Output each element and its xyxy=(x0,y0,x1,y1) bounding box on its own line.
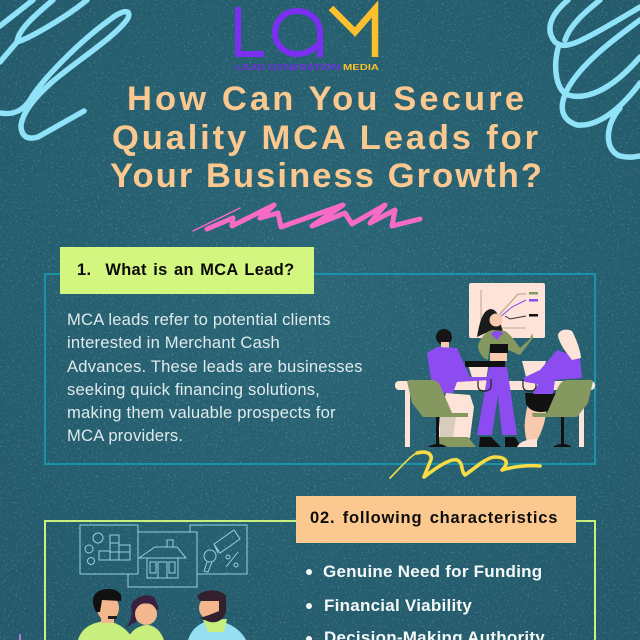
text block: definition: MCA providers. xyxy=(67,426,183,445)
person: right seated xyxy=(517,330,582,447)
icon: chart board xyxy=(469,283,545,338)
bag handles xyxy=(478,379,536,391)
heading: what is an MCA lead: 1. What is an MCA Lead? xyxy=(77,261,294,279)
bullet list xyxy=(306,562,545,640)
person: left seated xyxy=(427,329,490,447)
text block: definition: Advances. These leads are businesses xyxy=(67,357,363,376)
text block: definition: MCA leads refer to potential clients xyxy=(67,310,331,329)
heading: following characteristics: 02. following characteristics xyxy=(310,509,558,527)
heading: following characteristics xyxy=(296,496,576,543)
text block: definition: seeking quick financing solutions, xyxy=(67,380,320,399)
person: bearded man xyxy=(188,590,246,640)
heading: what is an MCA lead xyxy=(60,247,314,294)
title: How Can You Secure xyxy=(127,80,524,118)
logo: LEAD GENERATION xyxy=(236,62,340,72)
text block: definition: making them valuable prospects for xyxy=(67,403,336,422)
person: man with moustache xyxy=(78,589,134,640)
table xyxy=(395,381,595,447)
title: Your Business Growth? xyxy=(110,157,542,195)
text block: definition xyxy=(67,310,363,445)
person: presenter xyxy=(465,309,533,447)
chair: right xyxy=(532,380,593,447)
panel: following characteristics xyxy=(44,520,596,640)
chair: left xyxy=(407,380,468,447)
logo: MEDIA xyxy=(343,62,379,72)
bullet list: Genuine Need for Funding xyxy=(323,562,542,581)
laptops xyxy=(467,361,546,381)
bullet list: Financial Viability xyxy=(324,596,472,615)
text block: definition: interested in Merchant Cash xyxy=(67,333,280,352)
panel: what is an MCA lead xyxy=(44,273,596,465)
title: Quality MCA Leads for xyxy=(112,119,538,157)
person: woman xyxy=(124,595,164,640)
